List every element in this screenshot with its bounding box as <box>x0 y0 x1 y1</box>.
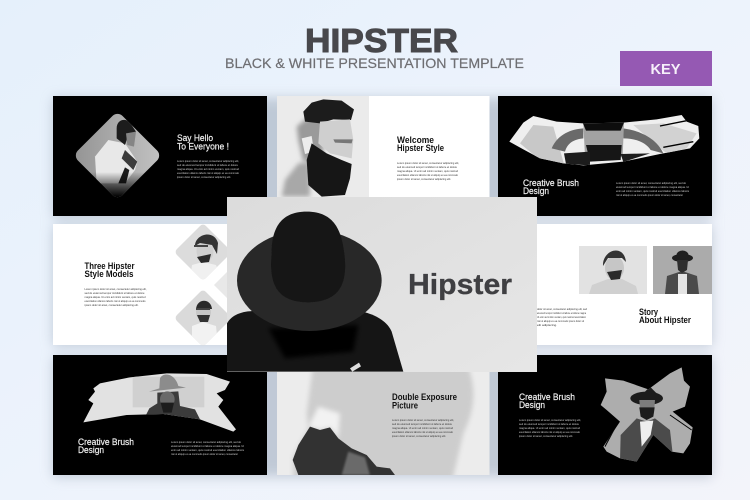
body text: Lorem ipsum dolor sit amet, consectetur adipiscing elit, <box>392 418 454 422</box>
panel: creative brush top right <box>498 96 712 216</box>
body text: exercitation ullamco laboris nisi ut aliquip ex ea commodo <box>397 173 458 177</box>
body text <box>519 418 581 438</box>
heading: Double Exposure <box>392 391 457 402</box>
body text: sed do eiusmod tempor incididunt ut labore et dolore <box>397 165 457 169</box>
photo: middle diamond sliver <box>214 271 228 299</box>
body text: Lorem ipsum dolor sit amet, consectetur adipiscing elit, <box>519 418 581 422</box>
body text <box>616 181 689 197</box>
body text: sed do eiusmod tempor incididunt ut labore et dolore <box>84 291 145 295</box>
hero title: Hipster <box>408 269 512 301</box>
body text: nisi ut aliquip ex ea commodo ipsum dolor sit <box>537 319 584 323</box>
body text: ipsum dolor sit amet, consectetur adipiscing elit. <box>519 434 573 438</box>
heading: Hipster Style <box>397 142 444 153</box>
photo: top diamond portrait <box>176 224 227 280</box>
heading: Style Models <box>84 268 134 279</box>
body text <box>537 307 587 327</box>
heading: Creative Brush <box>78 436 134 447</box>
body text: magna aliqua. Ut enim ad minim veniam, quis nostrud <box>177 167 239 171</box>
body text: ipsum dolor sit amet, consectetur adipiscing elit. <box>392 434 446 438</box>
body text: Lorem ipsum dolor sit amet, consectetur adipiscing elit, sed do <box>616 181 686 185</box>
tag <box>350 363 361 372</box>
panel: welcome hipster style <box>277 96 490 200</box>
photo: man with hat <box>653 246 712 294</box>
body text: ipsum dolor sit amet, consectetur adipiscing elit. <box>84 303 139 307</box>
panel: say hello <box>53 96 267 216</box>
photo: figure with black hat <box>227 212 403 372</box>
body text: sed do eiusmod tempor incididunt ut labore et dolore <box>519 422 579 426</box>
body text <box>392 418 454 438</box>
heading: Three Hipster <box>84 260 135 271</box>
body text: enim ad minim veniam, quis nostrud exercitation ullamco laboris <box>171 448 244 452</box>
heading <box>523 177 579 196</box>
heading: Design <box>519 399 545 410</box>
heading: About Hipster <box>639 314 691 325</box>
heading: Welcome <box>397 134 434 145</box>
heading <box>177 132 229 152</box>
heading: Design <box>78 444 104 455</box>
heading <box>639 306 691 325</box>
body text: exercitation ullamco laboris nisi ut aliquip ex ea commodo <box>519 430 580 434</box>
body text: Lorem ipsum dolor sit amet, consectetur adipiscing elit, sed do <box>171 440 241 444</box>
heading: Creative Brush <box>519 391 575 402</box>
body text: enim ad minim veniam, quis nostrud exercitation ullamco laboris <box>616 189 689 193</box>
body text: Lorem ipsum dolor sit amet, consectetur adipiscing elit, <box>177 159 239 163</box>
heading <box>84 260 135 279</box>
body text: ipsum dolor sit amet, consectetur adipiscing elit. <box>177 175 231 179</box>
body text: magna aliqua. Ut enim ad minim veniam, quis nostrud <box>397 169 458 173</box>
body text: magna aliqua. Ut enim ad minim veniam, quis nostrud <box>392 426 453 430</box>
heading <box>519 391 575 410</box>
photo: man with glasses <box>579 246 647 294</box>
body text: magna aliqua. Ut enim ad minim veniam, quis nostrud <box>519 426 580 430</box>
panel: hero slide <box>227 197 537 372</box>
body text: Ut enim ad minim veniam, quis nostrud exercitation <box>537 315 586 319</box>
body text <box>397 161 459 181</box>
heading: Story <box>639 306 659 317</box>
slide shadows <box>53 98 712 477</box>
photo: x brush with man in hat <box>600 367 693 462</box>
body text: elit adipiscing. <box>537 323 557 327</box>
body text: exercitation ullamco laboris nisi ut aliquip ex ea commodo <box>84 299 146 303</box>
photo: bottom diamond portrait <box>176 290 227 346</box>
panel: story about hipster <box>537 224 712 345</box>
panel: double exposure picture <box>277 372 490 475</box>
hat crown <box>271 212 345 302</box>
photo: man in diamond <box>76 114 160 198</box>
body text: exercitation ullamco laboris nisi ut aliquip ex ea commodo <box>177 171 239 175</box>
body text <box>84 287 147 307</box>
heading: Picture <box>392 400 418 410</box>
body text: sed do eiusmod tempor incididunt ut labore et dolore <box>392 422 452 426</box>
photo: brush stroke with man in hat <box>83 373 236 432</box>
body text: eiusmod tempor incididunt ut labore et dolore magna aliqua. Ut <box>171 444 244 448</box>
panel: creative brush bottom left <box>53 355 267 475</box>
shadow under brim <box>268 325 358 358</box>
body text: exercitation ullamco laboris nisi ut aliquip ex ea commodo <box>392 430 453 434</box>
panel: creative brush bottom right <box>498 355 712 475</box>
heading: Creative Brush <box>523 177 579 188</box>
body text: magna aliqua. Ut enim ad minim veniam, quis nostrud <box>84 295 146 299</box>
panel: three hipster style models <box>53 222 232 348</box>
body text: ipsum dolor sit amet, consectetur adipiscing elit. <box>397 177 451 181</box>
body text: nisi ut aliquip ex ea commodo ipsum dolor sit amet, consectetur <box>171 452 238 456</box>
heading: Design <box>523 185 549 196</box>
body text: Lorem ipsum dolor sit amet, consectetur adipiscing elit, <box>397 161 459 165</box>
heading <box>397 134 444 153</box>
subtitle: BLACK & WHITE PRESENTATION TEMPLATE <box>225 55 524 71</box>
badge: KEY <box>620 51 712 86</box>
photo: double exposure beard profile <box>282 99 354 197</box>
body text <box>177 159 239 179</box>
heading: To Everyone ! <box>177 140 229 152</box>
hat brim <box>237 230 382 331</box>
body text: eiusmod tempor incididunt ut labore et dolore magna aliqua. Ut <box>616 185 689 189</box>
body text: nisi ut aliquip ex ea commodo ipsum dolor sit amet, consectetur <box>616 193 683 197</box>
badge: KEY: KEY <box>650 62 681 78</box>
torso <box>227 311 403 372</box>
heading <box>78 436 134 455</box>
photo: double exposure head with mountain <box>292 372 474 475</box>
body text: dolor sit amet, consectetur adipiscing elit, sed <box>537 307 587 311</box>
body text: sed do eiusmod tempor incididunt ut labore et dolore <box>177 163 238 167</box>
title: HIPSTER <box>305 22 458 59</box>
photo: brush stroke with tattooed man <box>509 115 700 166</box>
body text <box>171 440 244 456</box>
body text: eiusmod tempor incididunt ut labore et dolore magna <box>537 311 586 315</box>
heading <box>392 391 457 410</box>
heading: Say Hello <box>177 132 213 143</box>
body text: Lorem ipsum dolor sit amet, consectetur adipiscing elit, <box>84 287 147 291</box>
